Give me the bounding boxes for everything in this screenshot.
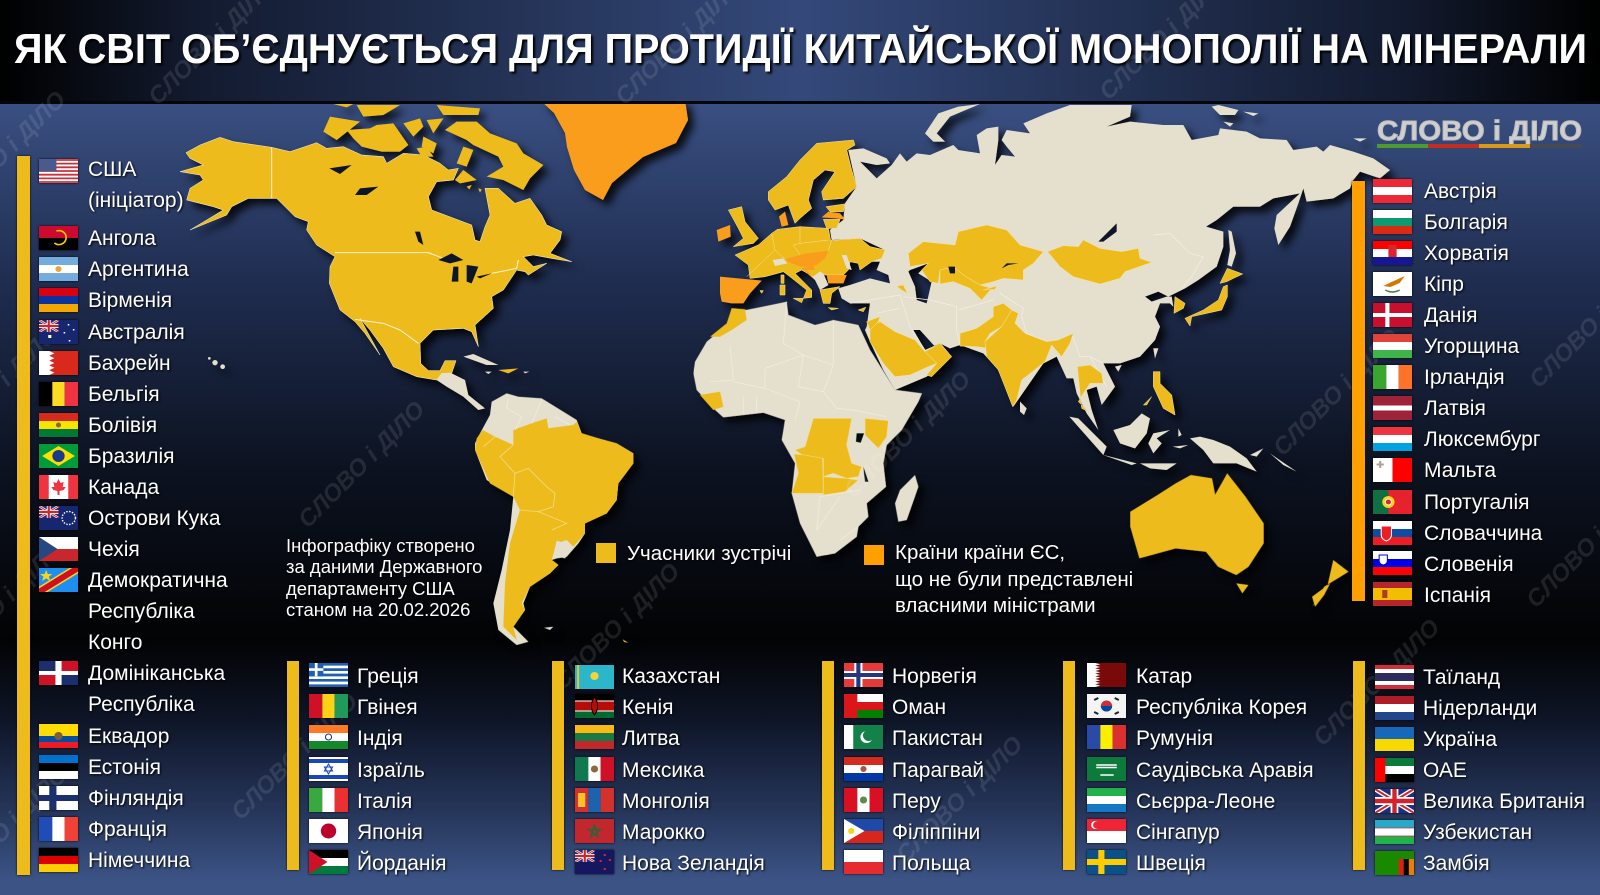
watermarks: СЛОВО і ДІЛО (891, 731, 1029, 868)
watermarks: СЛОВО і ДІЛО (548, 558, 686, 695)
panel: right EU country list: Кіпр (1424, 273, 1464, 296)
panel: right EU country list: Болгарія (1424, 211, 1508, 234)
panel: list column 3: Казахстан (622, 665, 720, 688)
map: Asia participants (867, 223, 1243, 415)
country: США (38, 158, 138, 184)
panel: list column 4: Норвегія (892, 665, 977, 688)
panel: list column 2: Гвінея (357, 696, 418, 719)
panel: left country list: Австралія (88, 321, 185, 344)
map: Europe (717, 140, 907, 312)
panel: right EU country list: Іспанія (1424, 584, 1491, 607)
country: Угорщина (1372, 334, 1374, 358)
country: Казахстан (574, 664, 720, 690)
panel: right EU country list: Латвія (1424, 397, 1486, 420)
country: Домініканська Республіка (38, 661, 226, 686)
panel: left country list: Бельгія (88, 383, 160, 406)
country: Катар (1086, 663, 1088, 687)
watermarks: СЛОВО і ДІЛО (1308, 614, 1446, 751)
panel: list column 2: Індія (357, 727, 403, 750)
panel: list column 3: Нова Зеландія (622, 852, 765, 875)
panel: list column 2: Йорданія (357, 852, 447, 875)
panel: left country list: Чехія (88, 538, 140, 561)
country: Словаччина (1372, 521, 1374, 545)
country: Франція (38, 816, 168, 843)
panel: left country list (16, 154, 228, 876)
country: Велика Британія (1374, 789, 1376, 813)
legend: EU countries not represented: власними міністрами (895, 594, 1096, 617)
country: Данія (1372, 303, 1374, 327)
country: Польща (843, 850, 845, 874)
panel: left country list: Домініканська (88, 662, 225, 685)
panel: list column 6: Таїланд (1423, 666, 1500, 689)
country: Демократична Республіка Конго (38, 567, 228, 592)
panel: list column 5: Сінгапур (1136, 821, 1220, 844)
country: Оман (843, 694, 845, 718)
panel: list column 5: Республіка Корея (1136, 696, 1307, 719)
country: Республіка Корея (1086, 694, 1088, 718)
panel: list column 6: Замбія (1423, 852, 1490, 875)
panel: list column 3: Кенія (622, 696, 674, 719)
panel: left country list: США (88, 158, 136, 181)
legend: EU countries not represented (864, 541, 1133, 617)
country: Румунія (1086, 725, 1088, 749)
panel: list column 3: Мексика (622, 759, 704, 782)
panel: right EU country list: Словаччина (1424, 522, 1542, 545)
panel: left country list: Бразилія (88, 445, 175, 468)
country: Замбія (1374, 851, 1376, 875)
panel: right EU country list: Хорватія (1424, 242, 1509, 265)
watermarks: СЛОВО і ДІЛО (1268, 324, 1406, 461)
country: Канада (38, 474, 160, 500)
panel: left country list: Фінляндія (88, 787, 184, 810)
panel: list column 4: Парагвай (892, 759, 984, 782)
panel: left country list: Вірменія (88, 289, 172, 312)
country: Люксембург (1372, 427, 1374, 451)
panel: list column 4: Оман (892, 696, 946, 719)
panel: right EU country list: Австрія (1424, 180, 1497, 203)
panel: left country list: Болівія (88, 414, 157, 437)
country: Бразилія (38, 443, 175, 468)
panel: left country list: Бахрейн (88, 352, 171, 375)
country: Йорданія (308, 848, 448, 877)
country: Португалія (1372, 490, 1374, 514)
country: Болгарія (1372, 210, 1374, 234)
map: Africa (693, 302, 922, 557)
panel: list column 6 (1353, 661, 1593, 873)
watermarks: СЛОВО і ДІЛО (839, 366, 977, 503)
source note: станом на 20.02.2026 (286, 599, 470, 620)
map: North America (180, 104, 572, 410)
name continuation: Республіка: Республіка (88, 693, 195, 716)
panel: right EU country list: Мальта (1424, 459, 1496, 482)
header band (0, 0, 1600, 104)
panel: list column 5: Катар (1136, 665, 1192, 688)
panel: right EU country list: Данія (1424, 304, 1478, 327)
country: Греція (308, 663, 419, 688)
source note: департаменту США (286, 578, 455, 599)
country: Бахрейн (38, 350, 172, 376)
country: Бельгія (38, 381, 160, 407)
country: Перу (843, 788, 845, 812)
country: Пакистан (843, 725, 845, 749)
name continuation: Конго: Конго (88, 631, 142, 654)
country: Мексика (574, 756, 706, 782)
panel: list column 4: Пакистан (892, 727, 983, 750)
panel: list column 2: Італія (357, 790, 412, 813)
panel: list column 6: Україна (1423, 728, 1497, 751)
note: ініціатор: (ініціатор) (88, 189, 184, 212)
world map (180, 104, 1398, 646)
country: Норвегія (843, 663, 845, 687)
country: Україна (1374, 727, 1376, 751)
country: Сінгапур (1086, 819, 1088, 843)
country: Латвія (1372, 396, 1374, 420)
panel: list column 6: Узбекистан (1423, 821, 1532, 844)
country: Хорватія (1372, 241, 1374, 265)
country: Нова Зеландія (574, 850, 576, 874)
watermarks: СЛОВО і ДІЛО (293, 396, 431, 533)
country: Іспанія (1372, 582, 1374, 606)
panel: left country list: Німеччина (88, 849, 190, 872)
country: Естонія (38, 754, 162, 780)
map: Greenland (540, 100, 688, 200)
country: Сьєрра-Леоне (1086, 788, 1088, 812)
panel: list column 2: Японія (357, 821, 423, 844)
watermarks: СЛОВО і ДІЛО (226, 688, 364, 825)
country: Монголія (574, 786, 711, 814)
source note (286, 535, 482, 620)
panel: list column 5: Сьєрра-Леоне (1136, 790, 1275, 813)
country: Болівія (38, 412, 158, 438)
map: Australia and New Zealand (1130, 473, 1348, 607)
panel: left country list: Острови Кука (88, 507, 221, 530)
country: Фінляндія (38, 784, 185, 812)
panel: list column 6: Велика Британія (1423, 790, 1585, 813)
panel: list column 2: Ізраїль (357, 759, 425, 782)
country: Нідерланди (1374, 696, 1376, 720)
country: Острови Кука (38, 506, 221, 530)
panel: list column 5: Саудівська Аравія (1136, 759, 1314, 782)
country: Австрія (1372, 179, 1374, 203)
country: Японія (308, 818, 424, 844)
map: Eurasia (830, 104, 1390, 472)
country: Ізраїль (308, 756, 426, 784)
country: Італія (308, 786, 414, 814)
panel: left country list: Аргентина (88, 258, 189, 281)
country: Мальта (1372, 458, 1374, 482)
country: Словенія (1372, 551, 1374, 575)
country: Гвінея (308, 694, 418, 719)
country: Таїланд (1374, 665, 1376, 689)
country: Австралія (38, 319, 186, 346)
country: Ірландія (1372, 365, 1374, 389)
country: ОАЕ (1374, 758, 1376, 782)
legend: EU countries not represented: Країни країни ЄС, (895, 541, 1065, 564)
country: Швеція (1086, 850, 1088, 874)
panel: list column 4: Перу (892, 790, 941, 813)
panel: list column 3: Монголія (622, 790, 710, 813)
panel: right EU country list: Ірландія (1424, 366, 1505, 389)
country: Узбекистан (1374, 820, 1376, 844)
country: Ангола (38, 224, 158, 252)
panel: right EU country list: Люксембург (1424, 428, 1541, 451)
panel: list column 4 (822, 661, 1012, 871)
country: Вірменія (38, 286, 173, 314)
panel: left country list: Еквадор (88, 725, 169, 748)
panel: left country list: Демократична (88, 569, 228, 592)
panel: left country list: Франція (88, 818, 167, 841)
panel: list column 5: Румунія (1136, 727, 1213, 750)
panel: list column 3: Литва (622, 727, 680, 750)
panel: left country list: Канада (88, 476, 159, 499)
country: Чехія (38, 536, 140, 562)
panel: list column 6: ОАЕ (1423, 759, 1467, 782)
panel: left country list: Ангола (88, 227, 156, 250)
name continuation: Республіка: Республіка (88, 600, 195, 623)
map: South America (475, 393, 633, 645)
source note: Інфографіку створено (286, 535, 475, 556)
country: Марокко (574, 818, 706, 846)
panel: left country list: Естонія (88, 756, 161, 779)
panel: list column 5: Швеція (1136, 852, 1206, 875)
country: Кіпр (1372, 272, 1374, 296)
country: Парагвай (843, 757, 845, 781)
panel: right EU country list: Португалія (1424, 491, 1530, 514)
country: Еквадор (38, 723, 170, 749)
panel: list column 5 (1063, 661, 1323, 871)
country: Кенія (574, 694, 674, 719)
legend: EU countries not represented: що не були представлені (895, 568, 1133, 590)
panel: list column 4: Філіппіни (892, 821, 980, 844)
legend: meeting participants: Учасники зустрічі (627, 542, 791, 565)
country: Індія (308, 724, 404, 751)
panel: right EU country list (1352, 178, 1567, 608)
panel: right EU country list: Словенія (1424, 553, 1514, 576)
source note: за даними Державного (286, 556, 482, 577)
country: Аргентина (38, 256, 190, 282)
panel: list column 3: Марокко (622, 821, 705, 844)
country: Німеччина (38, 846, 192, 874)
panel: right EU country list: Угорщина (1424, 335, 1519, 358)
panel: list column 6: Нідерланди (1423, 697, 1537, 720)
country: Філіппіни (843, 819, 845, 843)
country: Литва (574, 724, 681, 750)
panel: list column 2 (286, 661, 448, 877)
panel: list column 4: Польща (892, 852, 970, 875)
panel: list column 2: Греція (357, 665, 419, 688)
panel: list column 3 (550, 661, 766, 877)
country: Саудівська Аравія (1086, 757, 1088, 781)
